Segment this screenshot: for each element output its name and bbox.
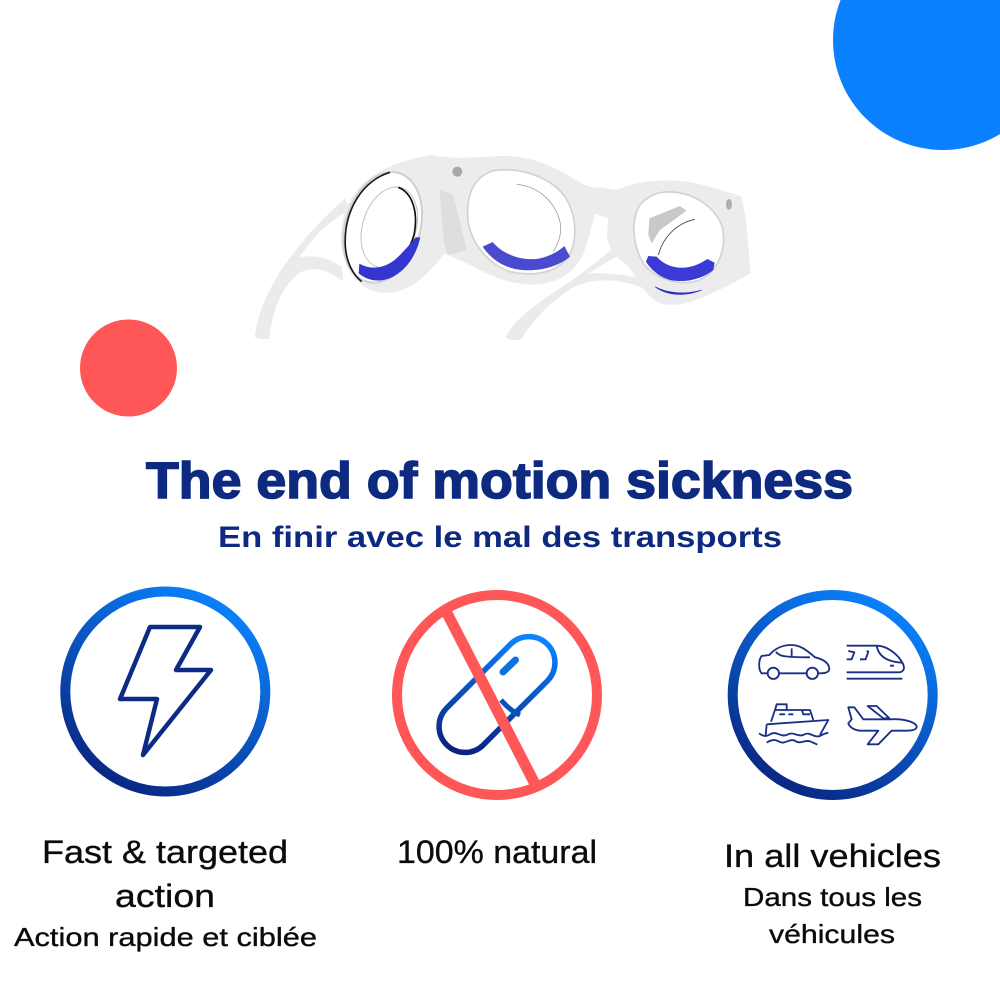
- label: fast and targeted action: Action rapide et ciblée: [14, 922, 317, 952]
- vehicle: train: [847, 646, 904, 679]
- left lens blue fluid: [359, 237, 420, 280]
- left lens black ring: [345, 172, 390, 282]
- vehicle: ship: [759, 704, 828, 745]
- icon: crossed-out pill: [397, 595, 597, 795]
- icon: vehicles in circle: [733, 595, 933, 795]
- right lens blue fluid: [646, 256, 715, 281]
- icon: lightning bolt in circle: [65, 592, 265, 792]
- vehicle: car: [759, 645, 829, 679]
- label: in all vehicles: [724, 838, 941, 949]
- right temple arm: [506, 248, 648, 340]
- frame logo right: [726, 199, 732, 210]
- blue decorative circle: [833, 0, 1000, 150]
- title: The end of motion sickness: [146, 452, 853, 509]
- label: fast and targeted action: action: [115, 878, 215, 914]
- right lens: [634, 192, 724, 283]
- left inner lens: [352, 180, 427, 275]
- label: fast and targeted action: [14, 834, 317, 952]
- centre lens thin arc: [517, 184, 561, 252]
- left lens ring: [330, 162, 435, 292]
- glasses frame: [341, 155, 751, 305]
- label: fast and targeted action: Fast & targeted: [42, 834, 288, 870]
- label: 100% natural: 100% natural: [397, 834, 597, 870]
- label: in all vehicles: véhicules: [769, 919, 895, 949]
- left temple arm: [255, 198, 350, 339]
- subtitle: En finir avec le mal des transports: [218, 521, 782, 554]
- label: in all vehicles: In all vehicles: [724, 838, 941, 874]
- frame hinge panel: [439, 190, 467, 255]
- right lens inner reflection: [648, 206, 687, 243]
- product: motion sickness glasses: [255, 155, 751, 340]
- vehicle icons group: [759, 645, 917, 745]
- centre lens blue fluid: [483, 242, 570, 270]
- red decorative circle: [80, 320, 177, 416]
- left lens inner dark arc: [383, 187, 415, 267]
- label: in all vehicles: Dans tous les: [743, 882, 922, 912]
- right lens thin arc: [658, 219, 695, 255]
- vehicle: plane: [848, 706, 917, 744]
- centre lens: [468, 170, 575, 274]
- frame logo left: [452, 167, 462, 177]
- right lens lower blue sliver: [655, 287, 702, 294]
